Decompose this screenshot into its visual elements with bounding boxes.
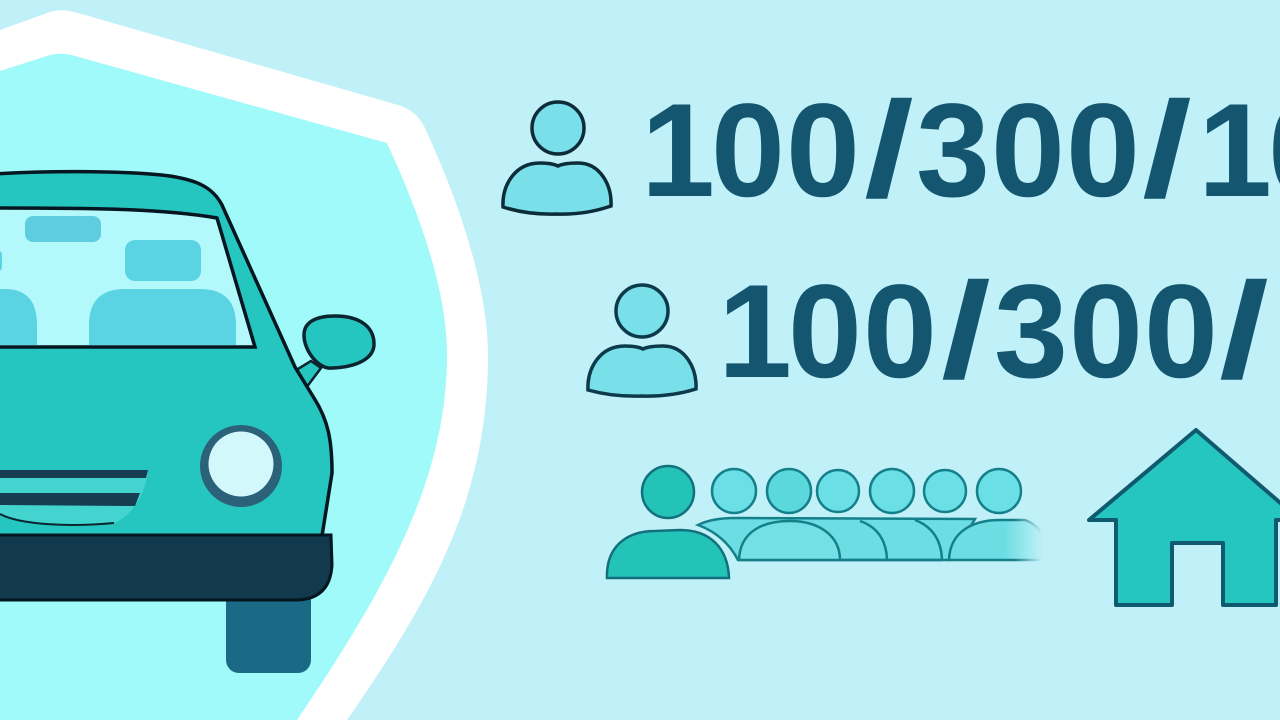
icon: person, line one [503,102,611,214]
car body [0,172,332,536]
limit figures, line one: 100 [641,77,860,225]
limit figures, line two: 100 [718,258,937,406]
car [0,172,374,673]
icon: wheel [226,585,311,673]
limit figures, line one: / [1142,73,1192,225]
limit figures, line two: 300 [994,258,1218,406]
icon: house [1089,430,1280,605]
windshield [0,208,255,347]
front row bodies [739,521,840,560]
icon: side mirror [293,316,374,388]
grille [0,470,148,526]
limit figures, line two [718,254,1269,406]
limit figures, line one: 300 [916,77,1140,225]
shoulder arcs [840,520,942,560]
icon: person, line two [588,285,696,396]
back row bodies [698,518,975,560]
interior: rear view mirror and seats [0,216,236,345]
limit figures, line one: / [864,73,914,225]
shield [0,10,488,720]
limit figures, line two: / [1219,254,1269,406]
limit figures, line two: / [941,254,991,406]
limit figures, line one [641,73,1280,225]
icon: group of people [607,466,1042,578]
small heads [712,469,1021,513]
bumper [0,535,332,600]
large person [607,466,729,578]
headlight [200,425,282,507]
